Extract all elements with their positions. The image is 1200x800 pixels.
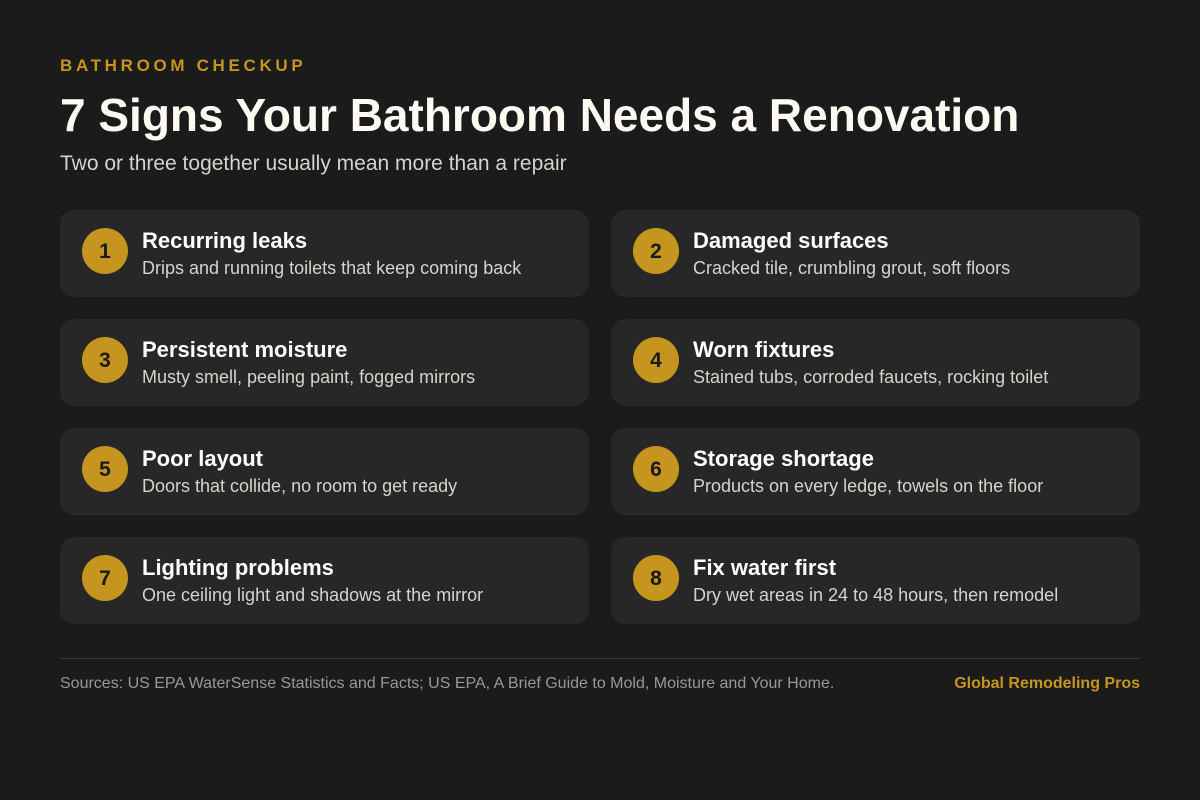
heading 8: Fix water first xyxy=(693,555,836,580)
brand name: Global Remodeling Pros xyxy=(954,675,1140,692)
heading 3: Persistent moisture xyxy=(142,337,347,362)
number badge 4: 4 xyxy=(650,349,662,372)
number badge 6: 6 xyxy=(650,458,662,481)
number badge 4 xyxy=(633,337,679,383)
description 2: Cracked tile, crumbling grout, soft floors xyxy=(693,258,1010,278)
description 7: One ceiling light and shadows at the mirror xyxy=(142,585,483,605)
description 5: Doors that collide, no room to get ready xyxy=(142,476,457,496)
description 8: Dry wet areas in 24 to 48 hours, then remodel xyxy=(693,585,1058,605)
description 4: Stained tubs, corroded faucets, rocking toilet xyxy=(693,367,1048,387)
card 8: fix water first xyxy=(611,537,1140,624)
number badge 8: 8 xyxy=(650,567,662,590)
number badge 5: 5 xyxy=(99,458,111,481)
card 1: recurring leaks xyxy=(60,210,589,297)
description 1: Drips and running toilets that keep coming back xyxy=(142,258,521,278)
eyebrow label: BATHROOM CHECKUP xyxy=(60,56,306,75)
title: 7 Signs Your Bathroom Needs a Renovation xyxy=(60,89,1019,141)
card 5: poor layout xyxy=(60,428,589,515)
card 7: lighting problems xyxy=(60,537,589,624)
number badge 5 xyxy=(82,446,128,492)
number badge 8 xyxy=(633,555,679,601)
number badge 1: 1 xyxy=(99,240,111,263)
heading 7: Lighting problems xyxy=(142,555,334,580)
number badge 2 xyxy=(633,228,679,274)
heading 5: Poor layout xyxy=(142,446,263,471)
description 3: Musty smell, peeling paint, fogged mirrors xyxy=(142,367,475,387)
number badge 7: 7 xyxy=(99,567,111,590)
sources footnote: Sources: US EPA WaterSense Statistics and Facts; US EPA, A Brief Guide to Mold, Moisture and Your Home. xyxy=(60,675,834,692)
subtitle: Two or three together usually mean more than a repair xyxy=(60,152,567,175)
heading 4: Worn fixtures xyxy=(693,337,834,362)
number badge 3: 3 xyxy=(99,349,111,372)
number badge 3 xyxy=(82,337,128,383)
description 6: Products on every ledge, towels on the floor xyxy=(693,476,1043,496)
heading 2: Damaged surfaces xyxy=(693,228,889,253)
heading 1: Recurring leaks xyxy=(142,228,307,253)
card 3: persistent moisture xyxy=(60,319,589,406)
number badge 6 xyxy=(633,446,679,492)
number badge 7 xyxy=(82,555,128,601)
card 4: worn fixtures xyxy=(611,319,1140,406)
number badge 2: 2 xyxy=(650,240,662,263)
card 6: storage shortage xyxy=(611,428,1140,515)
number badge 1 xyxy=(82,228,128,274)
card 2: damaged surfaces xyxy=(611,210,1140,297)
heading 6: Storage shortage xyxy=(693,446,874,471)
